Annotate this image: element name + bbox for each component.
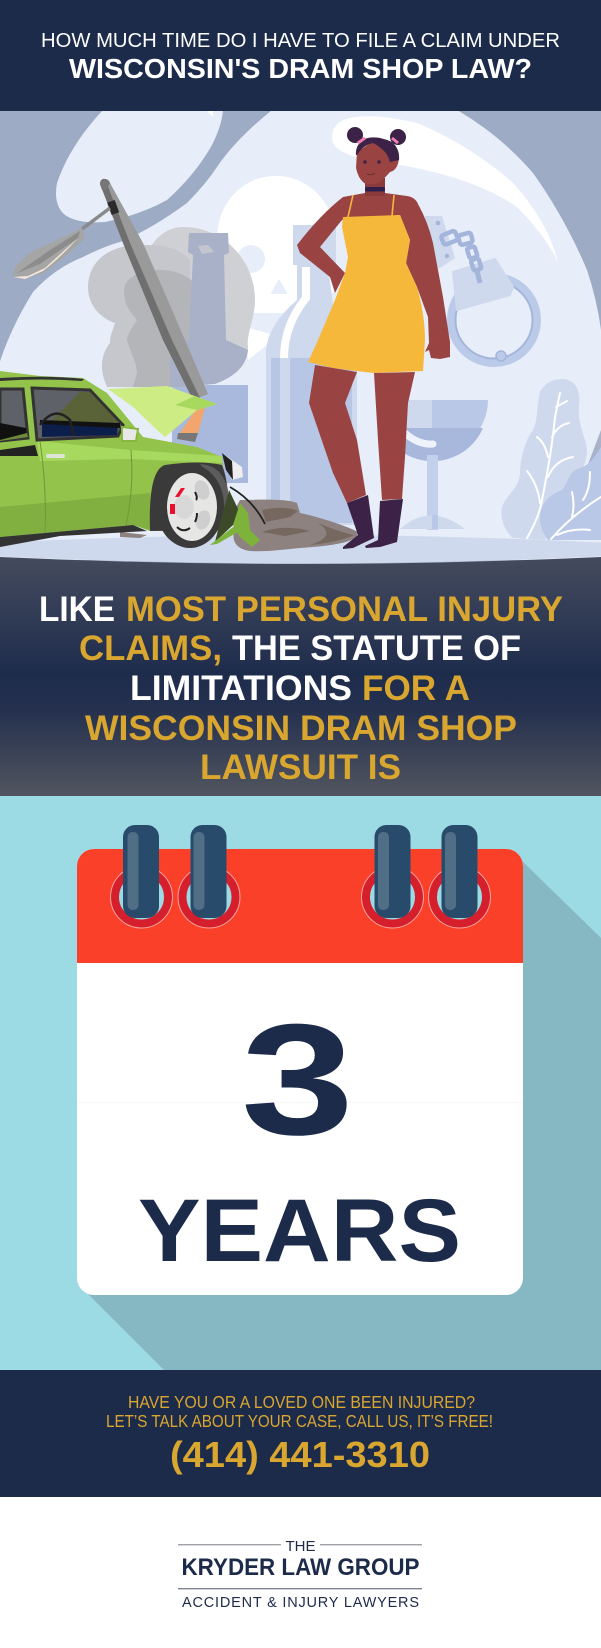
side mirror	[122, 427, 138, 441]
header band	[0, 0, 601, 111]
statement text: LIKE	[39, 590, 115, 629]
statement text: THE STATUTE OF	[232, 629, 521, 668]
handcuffs	[411, 216, 536, 362]
front window	[32, 388, 123, 440]
logo: KRYDER LAW GROUP	[182, 1554, 420, 1581]
rear door dark panel	[0, 445, 38, 456]
hair	[356, 137, 399, 162]
green car	[0, 371, 265, 548]
lamp post	[13, 179, 208, 442]
dome	[0, 110, 601, 560]
calendar long shadow	[88, 860, 601, 1370]
binding rings	[115, 870, 486, 924]
face	[356, 140, 399, 184]
neck	[365, 178, 385, 196]
bumper wreck	[210, 490, 260, 547]
statement text: WISCONSIN DRAM SHOP	[85, 709, 517, 748]
roof line	[0, 377, 84, 381]
right bottle	[266, 225, 357, 525]
illustration background	[0, 111, 601, 571]
white swoosh	[332, 116, 558, 262]
statement text: FOR A	[362, 669, 470, 708]
statement text: LIMITATIONS	[130, 669, 352, 708]
heading line 1: HOW MUCH TIME DO I HAVE TO FILE A CLAIM UNDER	[41, 29, 560, 52]
logo	[178, 1539, 422, 1611]
heading line 2: WISCONSIN'S DRAM SHOP LAW?	[69, 53, 532, 84]
wire	[230, 487, 265, 524]
call to action band: LET’S TALK ABOUT YOUR CASE, CALL US, IT’S FREE!	[106, 1411, 493, 1431]
door lines	[40, 441, 132, 532]
skull	[217, 176, 336, 360]
blob upper left	[56, 110, 223, 222]
logo: ACCIDENT & INJURY LAWYERS	[182, 1595, 419, 1611]
boots	[343, 495, 374, 549]
dress	[308, 215, 425, 373]
puddle	[120, 500, 358, 551]
legs	[309, 365, 366, 503]
rear window	[0, 389, 28, 441]
sill	[0, 525, 147, 547]
cta text: HAVE YOU OR A LOVED ONE BEEN INJURED?	[128, 1392, 475, 1412]
arms and torso	[297, 193, 450, 359]
YEARS: YEARS	[138, 1180, 461, 1280]
car body	[0, 371, 226, 537]
wine glass	[400, 400, 488, 530]
phone number: (414) 441-3310	[170, 1434, 430, 1475]
calendar	[77, 825, 523, 1295]
number 3: 3	[241, 992, 354, 1168]
calendar red header	[77, 849, 523, 989]
gradient panel	[0, 557, 601, 796]
teal calendar panel	[0, 796, 601, 1370]
left bottle body	[172, 385, 248, 483]
plants	[501, 379, 601, 540]
hood	[108, 386, 217, 437]
tire	[156, 464, 224, 548]
statement text: MOST PERSONAL INJURY	[126, 590, 563, 629]
headlight	[222, 453, 243, 480]
calendar page	[77, 849, 523, 1295]
statement text	[39, 590, 563, 787]
wheel arch	[150, 462, 228, 531]
dashboard	[42, 423, 118, 437]
binding pins	[123, 825, 478, 918]
call to action band	[0, 1370, 601, 1497]
statement text: CLAIMS,	[79, 629, 222, 668]
logo: THE	[286, 1539, 316, 1555]
left bottle neck	[170, 233, 248, 387]
woman	[297, 127, 450, 549]
dress straps	[348, 195, 394, 217]
shoulder highlight	[37, 441, 222, 463]
rim	[167, 473, 217, 541]
choker	[365, 187, 385, 192]
smoke	[88, 227, 255, 387]
illustration: crash scene	[0, 110, 601, 571]
statement text: LAWSUIT IS	[200, 748, 401, 787]
floor	[0, 535, 601, 564]
lower body shading	[0, 493, 153, 537]
